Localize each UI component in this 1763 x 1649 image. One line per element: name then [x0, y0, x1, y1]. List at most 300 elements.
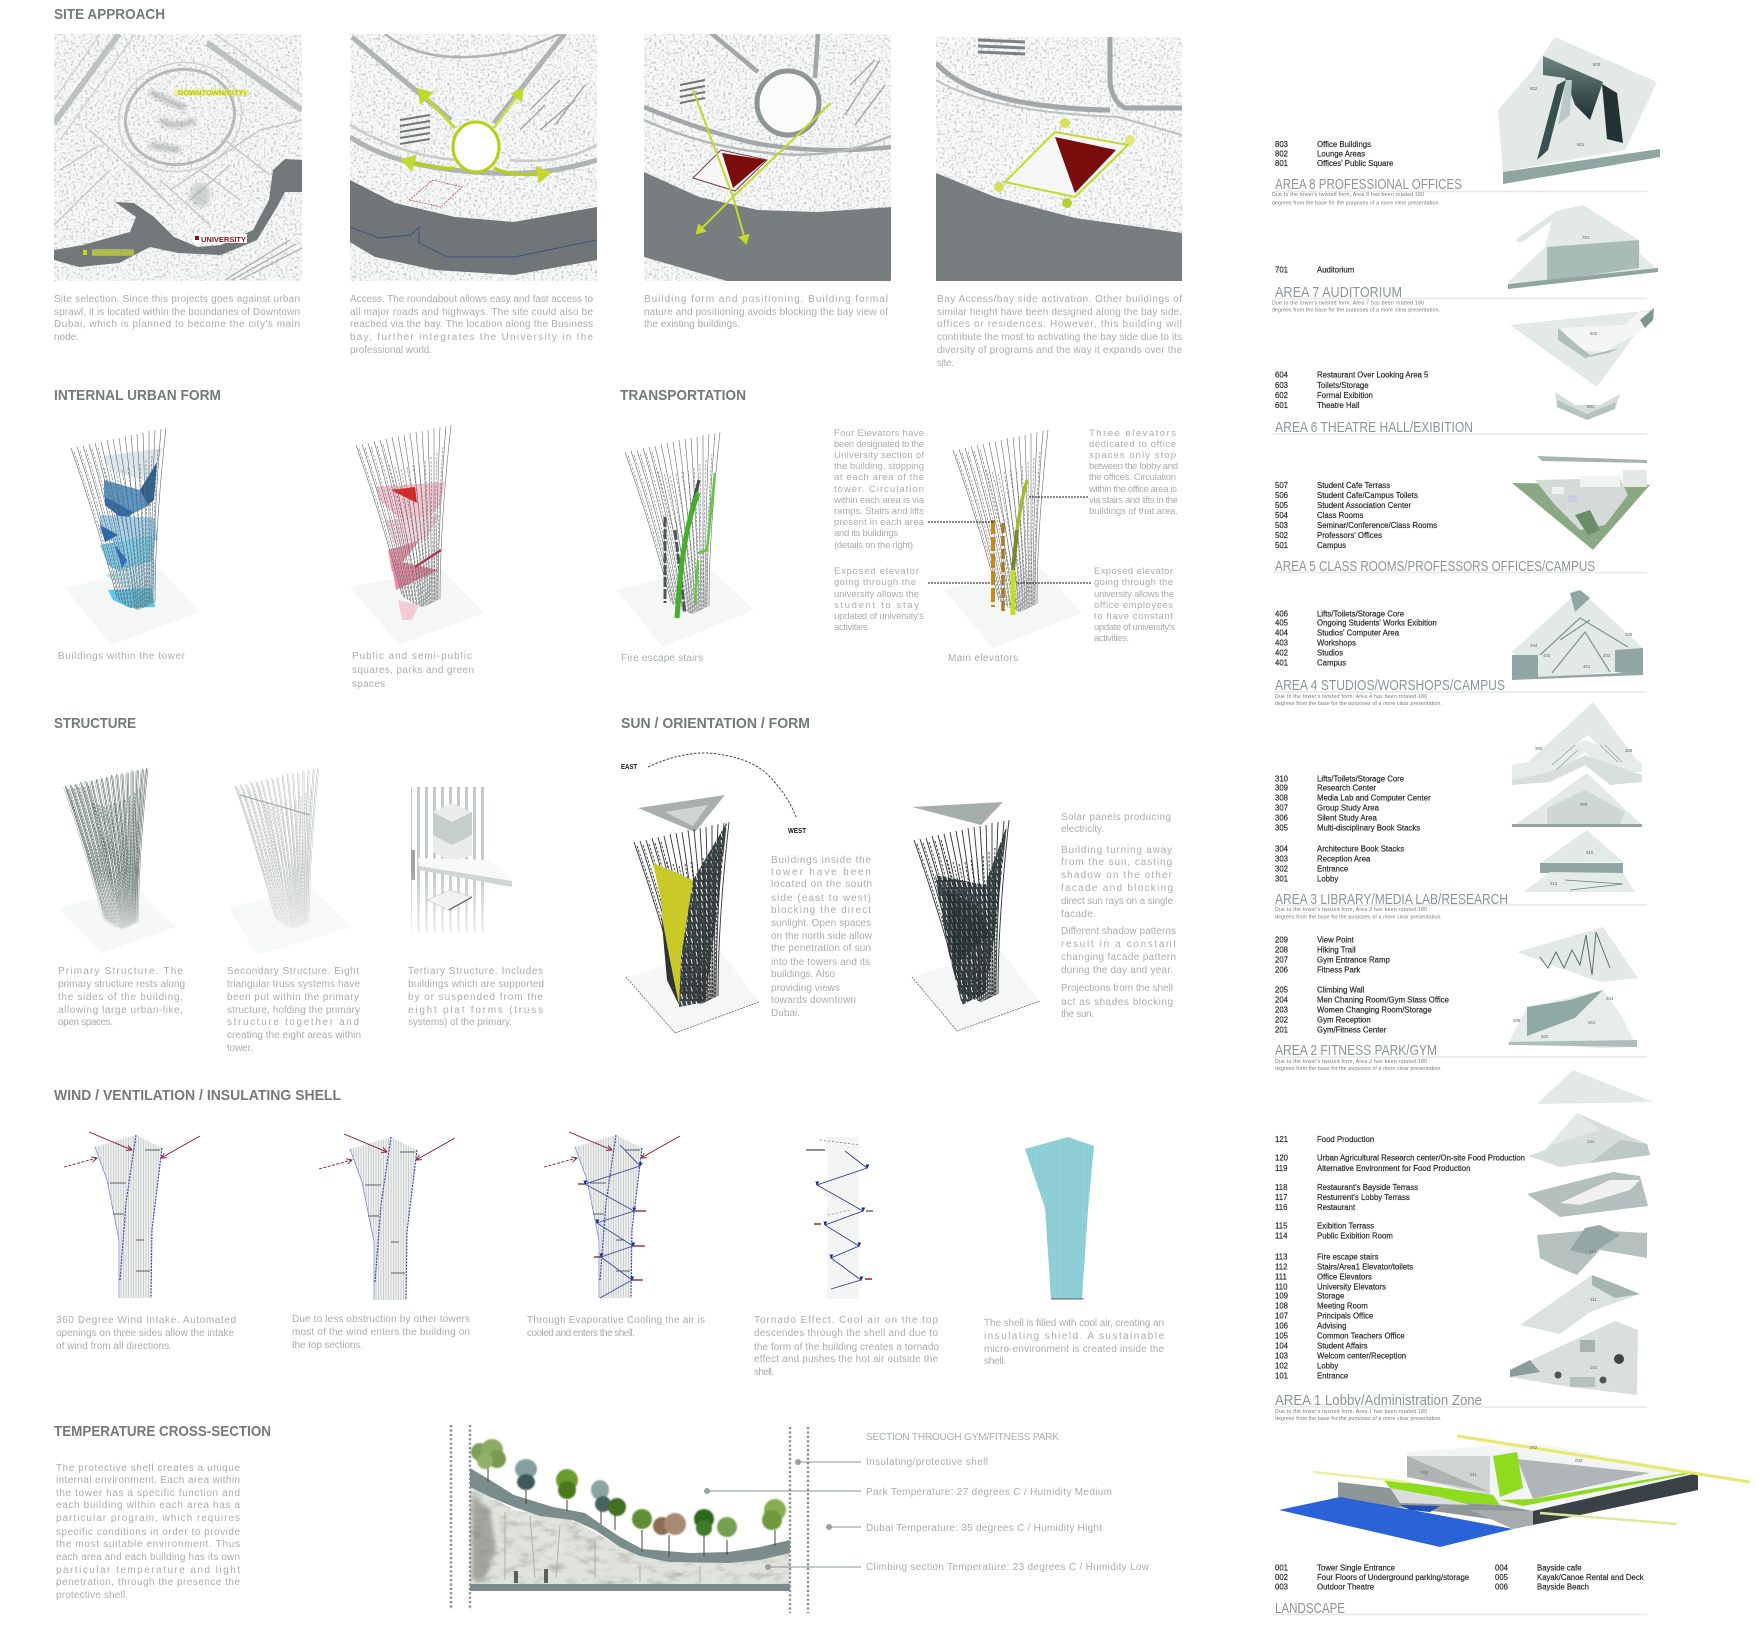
caption: buildings within the tower: Buildings within the tower	[58, 651, 186, 662]
axon: fitness park and gym: 205	[1513, 1018, 1521, 1023]
text: bay access: similar height have been designed along the bay side,	[937, 307, 1182, 318]
legend: area 5: 507	[1275, 481, 1288, 490]
legend: area 1: 121	[1275, 1135, 1288, 1144]
leader: park temperature: Park Temperature: 27 degrees C / Humidity Medium	[866, 1487, 1112, 1498]
text: buildings inside the tower: on the north side allow	[771, 931, 873, 942]
text: primary structure	[58, 966, 185, 1028]
text: four elevators: within each area is via	[833, 495, 925, 506]
legend: area 4: Studios	[1317, 648, 1343, 658]
legend: area 1: Lobby	[1317, 1362, 1338, 1370]
legend: area 5: 505	[1275, 501, 1289, 510]
axon: professional offices	[1498, 37, 1660, 184]
map: site selection: DOWNTOWN(CITY)	[178, 90, 246, 97]
text: solar and shadow notes	[1061, 812, 1176, 1020]
legend: landscape: 003	[1275, 1582, 1288, 1592]
legend: area 1: Storage	[1317, 1292, 1344, 1300]
axon: landscape site	[1279, 1436, 1750, 1547]
legend: area 2: Climbing Wall	[1317, 986, 1365, 994]
legend: area 1: Food Production	[1317, 1135, 1374, 1144]
leader: insulating shell	[795, 1457, 988, 1468]
text: buildings inside the tower: towards downtown	[771, 995, 856, 1006]
text: 360 degree wind intake: of wind from all directions.	[56, 1341, 172, 1352]
axon: fitness park and gym	[1509, 927, 1638, 1048]
legend: area 4: Campus	[1317, 658, 1346, 668]
diagram: tornado effect	[806, 1137, 873, 1299]
legend: area 3: Entrance	[1317, 864, 1348, 874]
text: less obstruction: Due to less obstruction by other towers	[292, 1314, 470, 1325]
legend: area 1: 120	[1275, 1154, 1289, 1162]
legend: area 6: Restaurant Over Looking Area 5	[1317, 370, 1429, 380]
text: access: bay, further integrates the University in the	[350, 332, 593, 343]
legend: landscape: 004	[1495, 1564, 1509, 1572]
legend: area 6: 603	[1275, 381, 1288, 390]
text: three elevators: within the office area is	[1088, 484, 1177, 495]
text: site selection	[54, 294, 300, 343]
text: primary structure: allowing large urban-like,	[58, 1005, 183, 1016]
text: four elevators: and its buildings	[834, 528, 898, 539]
legend: landscape: 001	[1275, 1564, 1288, 1572]
axon: studios and workshops: 401	[1583, 664, 1591, 669]
area 1	[1273, 1070, 1653, 1422]
text: protective shell: the most suitable environment. Thus	[56, 1539, 240, 1550]
text: exposed elevator offices: Exposed elevator	[1094, 566, 1173, 577]
text: solar and shadow notes: direct sun rays on a single	[1061, 896, 1173, 907]
text: secondary structure: creating the eight areas within	[227, 1030, 361, 1041]
legend: landscape: Outdoor Theatre	[1317, 1582, 1374, 1592]
text: solar and shadow notes: electricity.	[1061, 824, 1104, 835]
axon: studios and workshops: 403	[1603, 653, 1611, 658]
heading: area 8: AREA 8 PROFESSIONAL OFFICES	[1275, 176, 1462, 193]
legend: area 5: Student Cafe Terrass	[1317, 481, 1390, 490]
legend: area 3: 305	[1275, 824, 1289, 832]
axon: fitness park and gym: 202	[1541, 1034, 1549, 1039]
legend: area 4: 401	[1275, 658, 1288, 668]
text: exposed elevator offices: office employees	[1094, 600, 1173, 611]
text: protective shell: each building within each area has a	[56, 1500, 240, 1511]
legend: area 8: 803	[1275, 140, 1288, 149]
legend: area 1: Restaurant	[1317, 1203, 1356, 1212]
text: exposed elevator offices: activities.	[1094, 633, 1129, 644]
axon: professional offices: 801	[1577, 142, 1585, 147]
text: tornado effect: descendes through the shell and due to	[754, 1328, 938, 1339]
legend: area 1: Student Affairs	[1317, 1342, 1368, 1350]
text: protective shell: The protective shell creates a unique	[56, 1463, 240, 1474]
note: area 1 rotation: degrees from the base for the purposes of a more clear presentation.	[1275, 1416, 1442, 1422]
legend: area 2: View Point	[1317, 936, 1355, 944]
legend: area 1: Entrance	[1317, 1372, 1348, 1380]
note: area 8 rotation: degrees from the base for the purposes of a more clear presentation.	[1272, 200, 1440, 206]
map: site selection: BUSINESS BAY	[92, 250, 135, 257]
note: area 7 rotation: degrees from the base for the purposes of a more clear presentation.	[1272, 308, 1440, 314]
text: tornado effect: effect and pushes the hot air outside the	[754, 1354, 938, 1365]
legend: landscape: 002	[1275, 1573, 1288, 1582]
text: four elevators: present in each area	[834, 517, 925, 528]
legend: area 8: Office Buildings	[1317, 140, 1371, 149]
axon: professional offices: 802	[1530, 86, 1538, 91]
map: site selection	[54, 34, 302, 281]
legend: area 1: Principals Office	[1317, 1312, 1373, 1320]
area 3	[1273, 702, 1647, 920]
legend: area 7: Auditorium	[1317, 266, 1354, 274]
legend: area 3: 307	[1275, 804, 1288, 812]
note: area 7 rotation	[1272, 300, 1440, 314]
legend: area 1: 112	[1275, 1262, 1287, 1272]
text: secondary structure: tower.	[227, 1043, 253, 1054]
heading: internal urban form: INTERNAL URBAN FORM	[54, 387, 221, 404]
text: solar and shadow notes: Different shadow patterns	[1061, 926, 1176, 937]
text: exposed elevator university: university allows the	[834, 589, 919, 600]
legend: area 2: Gym Reception	[1317, 1016, 1371, 1024]
panel: sun orientation form	[621, 715, 1176, 1033]
panel: internal urban form	[54, 387, 484, 690]
note: area 1 rotation: Due to the tower's twisted form, Area 1 has been rotated 180	[1275, 1409, 1427, 1415]
legend: area 2: Fitness Park	[1317, 966, 1360, 974]
text: buildings inside the tower: the penetration of sun	[771, 943, 871, 954]
text: secondary structure: triangular truss systems have	[227, 979, 360, 990]
text: protective shell: penetration, through the presence the	[56, 1577, 240, 1588]
text: site selection: node.	[54, 332, 79, 343]
axon: lobby and administration stack: 114	[1589, 1249, 1597, 1254]
text: primary structure: primary structure rests along	[58, 979, 185, 990]
detail: tertiary structure	[411, 787, 512, 933]
text: primary structure: the sides of the building,	[58, 992, 183, 1003]
legend: area 2: Gym Entrance Ramp	[1317, 956, 1390, 964]
legend: area 3: Research Center	[1317, 784, 1376, 792]
legend: area 8: 801	[1275, 159, 1288, 168]
text: site selection: sprawl, it is located within the boundaries of Downtown	[54, 307, 300, 318]
legend: area 3: Architecture Book Stacks	[1317, 844, 1404, 854]
legend: area 1: Restaurant's Bayside Terrass	[1317, 1183, 1418, 1192]
legend: area 1: Meeting Room	[1317, 1302, 1368, 1310]
text: three elevators: the offices. Circulation	[1089, 472, 1176, 483]
legend: area 4: Ongoing Students' Works Exibition	[1317, 618, 1437, 628]
legend: area 5: Student Cafe/Campus Toilets	[1317, 491, 1418, 500]
text: protective shell: specific conditions in order to provide	[56, 1527, 240, 1538]
legend: area 4: 403	[1275, 638, 1288, 648]
text: building form: Building form and positioning. Building formal	[644, 294, 888, 305]
axon: class rooms and campus	[1512, 456, 1650, 550]
legend: area 8: Lounge Areas	[1317, 150, 1365, 158]
text: solar and shadow notes: facade and blocking	[1061, 883, 1173, 894]
axon: professional offices: 803	[1593, 62, 1601, 67]
heading: area 4: AREA 4 STUDIOS/WORSHOPS/CAMPUS	[1275, 677, 1505, 694]
area 6	[1273, 308, 1654, 436]
note: area 2 rotation: degrees from the base for the purposes of a more clear presentation.	[1275, 1066, 1442, 1072]
map: building form and positioning	[644, 33, 891, 281]
landscape	[1273, 1436, 1750, 1617]
legend: area 1: Fire escape stairs	[1317, 1252, 1379, 1262]
text: tornado effect: Tornado Effect. Cool air on the top	[754, 1315, 938, 1326]
axon: studios and workshops	[1512, 590, 1643, 680]
tower: public squares	[350, 425, 484, 645]
text: four elevators: the building, stopping	[834, 461, 924, 472]
legend: area 5: Campus	[1317, 541, 1346, 550]
legend: area 5: 503	[1275, 521, 1288, 530]
legend: area 3: Group Study Area	[1317, 804, 1380, 812]
text: solar and shadow notes: facade.	[1061, 909, 1096, 920]
legend: area 4	[1275, 610, 1437, 668]
legend: landscape: 006	[1495, 1582, 1508, 1592]
legend: area 1	[1275, 1135, 1525, 1380]
legend: landscape: Bayside cafe	[1537, 1564, 1582, 1572]
text: secondary structure: structure, holding the primary	[227, 1005, 360, 1016]
text: buildings inside the tower: tower have been	[771, 867, 871, 878]
legend: area 5: Class Rooms	[1317, 511, 1363, 520]
text: site selection: Dubai, which is planned to become the city's main	[54, 319, 300, 330]
text: four elevators: Four Elevators have	[834, 428, 924, 439]
axon: studios and workshops: 402	[1543, 653, 1551, 658]
axon: theatre hall	[1510, 308, 1654, 420]
legend: area 1: 107	[1275, 1312, 1288, 1320]
text: secondary structure: been put within the primary	[227, 992, 359, 1003]
legend: area 3: 304	[1275, 844, 1289, 854]
text: tertiary structure: systems) of the primary.	[408, 1017, 512, 1028]
caption: public and semi-public: Public and semi-public	[352, 651, 472, 662]
legend: area 5	[1275, 481, 1437, 550]
panel: transportation	[616, 387, 1178, 664]
text: four elevators: at each area of the	[834, 472, 924, 483]
panel: site approach	[54, 6, 1182, 369]
area 2	[1273, 927, 1647, 1072]
note: area 3 rotation: degrees from the base for the purposes of a more clear presentation.	[1275, 914, 1442, 920]
text: access: reached via the bay. The location along the Business	[350, 319, 593, 330]
heading: area 6: AREA 6 THEATRE HALL/EXIBITION	[1275, 419, 1473, 436]
caption: public and semi-public: spaces	[352, 679, 385, 690]
legend: area 2: 207	[1275, 956, 1288, 964]
shell dotted lines	[451, 1425, 808, 1613]
legend: area 1: University Elevators	[1317, 1282, 1386, 1292]
legend: area 5: 501	[1275, 541, 1288, 550]
text: exposed elevator offices: university allows the	[1094, 589, 1174, 600]
tower: main elevators	[944, 430, 1082, 648]
note: area 3 rotation: Due to the tower's twisted form, Area 3 has been rotated 180	[1275, 907, 1427, 913]
text: evaporative cooling	[527, 1315, 705, 1339]
text: access	[350, 294, 593, 356]
legend: area 2: 203	[1275, 1006, 1288, 1014]
text: solar and shadow notes: changing facade pattern	[1061, 952, 1176, 963]
legend: area 5: 504	[1275, 511, 1289, 520]
text: secondary structure: structure together and	[227, 1017, 359, 1028]
text: four elevators: tower. Circulation	[834, 484, 924, 495]
area 5	[1273, 456, 1650, 575]
legend: area 3: 303	[1275, 854, 1288, 864]
legend: area 6	[1275, 370, 1429, 410]
tower: buildings within	[65, 428, 200, 645]
text: buildings inside the tower: providing views	[771, 983, 840, 994]
text: four elevators: been designated to the	[834, 439, 924, 450]
heading: area 7: AREA 7 AUDITORIUM	[1275, 284, 1402, 301]
area 8	[1272, 37, 1660, 206]
legend: area 2: 206	[1275, 966, 1288, 974]
text: protective shell: the tower has a specific function and	[56, 1488, 240, 1499]
text: protective shell: internal environment. Each area within	[56, 1475, 240, 1486]
legend: area 1: 119	[1275, 1164, 1287, 1173]
map: site selection: UNIVERSITY	[201, 237, 246, 244]
legend: area 3: Silent Study Area	[1317, 814, 1377, 822]
text: less obstruction: most of the wind enters the building on	[292, 1327, 470, 1338]
legend: area 8: 802	[1275, 150, 1288, 158]
legend: area 3: Media Lab and Computer Center	[1317, 794, 1431, 802]
section drawing: gym and fitness park	[470, 1439, 790, 1591]
caption: main elevators: Main elevators	[948, 653, 1018, 664]
text: buildings inside the tower: buildings. Also	[771, 969, 835, 980]
text: solar and shadow notes: result in a constant	[1061, 939, 1176, 950]
leader: dubai temperature: Dubai Temperature: 35 degrees C / Humidity Hight	[866, 1523, 1102, 1534]
panel: temperature cross-section	[54, 1423, 1150, 1613]
text: less obstruction: the top sections.	[292, 1340, 363, 1351]
text: solar and shadow notes: Projections from the shell	[1061, 983, 1173, 994]
legend: area 1: 102	[1275, 1362, 1288, 1370]
text: evaporative cooling: cooled and enters the shell.	[527, 1328, 635, 1339]
text: building form	[644, 294, 888, 330]
panel: wind ventilation insulating shell	[54, 1087, 1164, 1378]
legend: area 1: Exibition Terrass	[1317, 1222, 1374, 1230]
legend: area 1: 110	[1275, 1282, 1288, 1292]
legend: area 3: 306	[1275, 814, 1288, 822]
legend: area 8: Offices' Public Square	[1317, 159, 1393, 168]
axon: landscape site: 002	[1530, 1445, 1538, 1450]
text: access: all major roads and highways. The site could also be	[350, 307, 593, 318]
tower: fire escape stairs	[616, 432, 754, 647]
heading: area 1: AREA 1 Lobby/Administration Zone	[1275, 1392, 1482, 1409]
legend: area 5: Seminar/Conference/Class Rooms	[1317, 521, 1437, 530]
text: access: professional world.	[350, 345, 432, 356]
legend: area 1: Common Teachers Office	[1317, 1332, 1405, 1340]
legend: area 1: Stairs/Area1 Elevator/toilets	[1317, 1262, 1413, 1272]
axon: theatre hall: 602	[1590, 331, 1598, 336]
legend: area 1: Public Exibition Room	[1317, 1232, 1393, 1240]
legend: area 5: Student Association Center	[1317, 501, 1411, 510]
axon: fitness park and gym: 204	[1606, 996, 1614, 1001]
diagram: evaporative cooling	[544, 1132, 680, 1298]
legend: area 3: Multi-disciplinary Book Stacks	[1317, 824, 1420, 832]
text: protective shell	[56, 1463, 240, 1601]
legend: area 1: 105	[1275, 1332, 1289, 1340]
text: secondary structure: Secondary Structure. Eight	[227, 966, 359, 977]
legend: area 1: 115	[1275, 1222, 1288, 1230]
legend: landscape: Tower Single Entrance	[1317, 1564, 1395, 1572]
legend: area 4: 406	[1275, 610, 1288, 618]
legend: area 5: Professors' Offices	[1317, 531, 1382, 540]
text: solar and shadow notes: shadow on the other	[1061, 870, 1173, 881]
tower: shadow study	[912, 802, 1040, 1031]
note: area 4 rotation: Due to the tower's twisted form, Area 4 has been rotated 180	[1275, 694, 1427, 700]
legend: area 6: 604	[1275, 370, 1289, 380]
diagram: wind intake	[64, 1132, 200, 1298]
text: exposed elevator offices: update of university's	[1094, 622, 1175, 633]
axon: library stack: 310	[1586, 850, 1594, 855]
caption: fire escape stairs: Fire escape stairs	[621, 653, 703, 664]
text: tornado effect: shell.	[754, 1367, 774, 1378]
text: insulating shell	[984, 1318, 1164, 1367]
legend: area 5: 506	[1275, 491, 1288, 500]
legend: area 2: 205	[1275, 986, 1289, 994]
text: protective shell: each area and each building has its own	[56, 1552, 240, 1563]
text: bay access: contribute the most to activating the bay side due to its	[937, 332, 1182, 343]
text: exposed elevator university: activities.	[834, 622, 870, 633]
area 4	[1273, 590, 1647, 707]
legend: area 2: 209	[1275, 936, 1288, 944]
legend: area 7: 701	[1275, 266, 1288, 274]
legend: area 3: Lifts/Toilets/Storage Core	[1317, 774, 1404, 784]
heading: area 3: AREA 3 LIBRARY/MEDIA LAB/RESEARCH	[1275, 891, 1508, 908]
text: exposed elevator university: Exposed elevator	[834, 566, 919, 577]
text: buildings inside the tower: Dubai.	[771, 1008, 800, 1019]
legend: area 4: Studios' Computer Area	[1317, 628, 1400, 638]
text: tertiary structure: buildings which are supported	[408, 979, 544, 990]
text: buildings inside the tower: Buildings inside the	[771, 855, 871, 866]
legend: landscape: Bayside Beach	[1537, 1582, 1589, 1592]
text: solar and shadow notes: Solar panels producing	[1061, 812, 1171, 823]
text: buildings inside the tower: into the towers and its	[771, 957, 870, 968]
text: protective shell: particular temperature and light	[56, 1565, 240, 1576]
text: evaporative cooling: Through Evaporative Cooling the air is	[527, 1315, 705, 1326]
text: three elevators: dedicated to office	[1089, 439, 1176, 450]
text: solar and shadow notes: act as shades blocking	[1061, 997, 1173, 1008]
map: bay access and activation	[936, 37, 1182, 281]
diagram: insulating shell	[1025, 1137, 1094, 1299]
text: primary structure: open spaces.	[58, 1017, 113, 1028]
legend: landscape: 005	[1495, 1573, 1509, 1582]
note: area 8 rotation	[1272, 192, 1440, 206]
legend: area 2: 208	[1275, 946, 1288, 954]
legend: area 1: Resturrent's Lobby Terrass	[1317, 1193, 1410, 1202]
text: exposed elevator university: updated of university's	[834, 611, 924, 622]
axon: auditorium: 701	[1582, 235, 1590, 240]
text: solar and shadow notes: during the day and year.	[1061, 965, 1173, 976]
heading: transportation: TRANSPORTATION	[620, 387, 746, 404]
diagram: top sections wind	[319, 1134, 455, 1300]
text: three elevators: Three elevators	[1089, 428, 1176, 439]
axon: lobby and administration stack: 121	[1587, 1139, 1595, 1144]
axon: landscape site: 004	[1421, 1470, 1429, 1475]
axon: library stack: 313	[1550, 881, 1558, 886]
arc: sun path	[648, 753, 796, 817]
leader lines	[928, 497, 1091, 583]
text: 360 degree wind intake	[56, 1315, 236, 1352]
legend: area 1: 101	[1275, 1372, 1288, 1380]
text: exposed elevator offices: going through the	[1094, 577, 1173, 588]
text: solar and shadow notes: Building turning away	[1061, 845, 1172, 856]
legend: area 3: 301	[1275, 874, 1288, 884]
legend: area 6: 601	[1275, 401, 1288, 410]
legend: area 6: Toilets/Storage	[1317, 381, 1369, 390]
note: area 4 rotation: degrees from the base for the purposes of a more clear presentation.	[1275, 701, 1442, 707]
axon: landscape site: 011	[1470, 1472, 1478, 1477]
legend: area 1: 117	[1275, 1193, 1287, 1202]
note: area 3 rotation	[1275, 907, 1442, 920]
text: bay access	[937, 294, 1182, 369]
text: bay access: offices or residences. However, this building will	[937, 319, 1182, 330]
text: buildings inside the tower: located on the south	[771, 879, 872, 890]
axon: theatre hall: 601	[1587, 404, 1595, 409]
axon: lobby and administration stack: 111	[1590, 1297, 1597, 1302]
area 7	[1272, 205, 1658, 314]
text: 360 degree wind intake: 360 Degree Wind Intake. Automated	[56, 1315, 236, 1326]
label: west: WEST	[788, 826, 806, 835]
legend: area 1: 103	[1275, 1352, 1288, 1360]
text: building form: the existing buildings.	[644, 319, 740, 330]
legend: area 5: 502	[1275, 531, 1288, 540]
heading: area 2: AREA 2 FITNESS PARK/GYM	[1275, 1042, 1437, 1059]
text: tertiary structure: Tertiary Structure. Includes	[408, 966, 543, 977]
text: bay access: diversity of programs and the way it expands over the	[937, 345, 1182, 356]
legend: area 2: 202	[1275, 1016, 1288, 1024]
text: bay access: site.	[937, 358, 954, 369]
heading: site approach: SITE APPROACH	[54, 6, 165, 23]
legend: area 6: 602	[1275, 391, 1288, 400]
text: 360 degree wind intake: openings on three sides allow the intake	[56, 1328, 234, 1339]
